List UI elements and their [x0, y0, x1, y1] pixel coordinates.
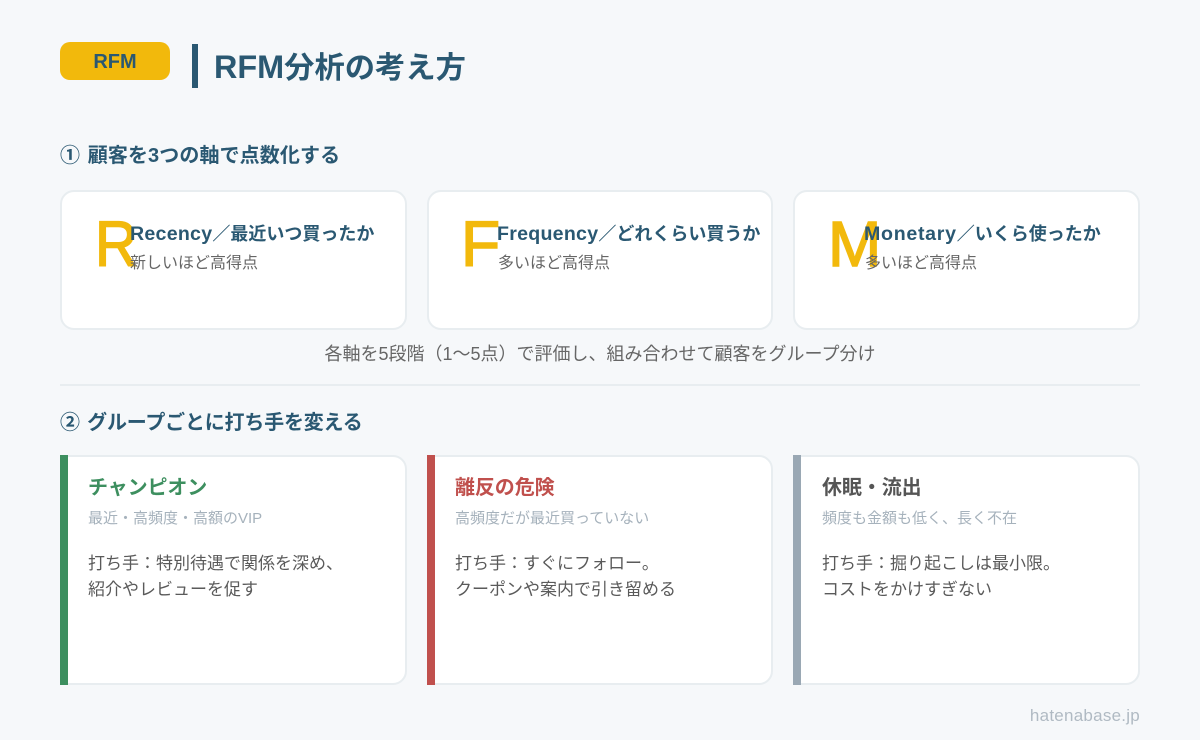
Recency heading: Recency／最近いつ買ったか [130, 223, 374, 245]
At risk description: 高頻度だが最近買っていない [455, 510, 649, 527]
Champion action: 打ち手：特別待遇で関係を深め、 [88, 554, 343, 573]
panel: Champion [60, 455, 407, 685]
Dormant action [822, 554, 1060, 599]
scoring note: 各軸を5段階（1〜5点）で評価し、組み合わせて顧客をグループ分け [325, 344, 875, 364]
Monetary description: 多いほど高得点 [865, 255, 977, 272]
Champion heading: チャンピオン [88, 477, 207, 499]
letter M: M [828, 208, 881, 280]
Dormant description: 頻度も金額も低く、長く不在 [822, 510, 1017, 527]
Frequency description: 多いほど高得点 [498, 255, 610, 272]
badge: RFM [60, 42, 170, 80]
badge: RFM: RFM [93, 51, 137, 73]
panel: Frequency [427, 190, 773, 330]
Dormant action: 打ち手：掘り起こしは最小限。 [822, 554, 1060, 573]
Dormant heading: 休眠・流出 [822, 477, 922, 499]
Champion action [88, 554, 343, 599]
At risk action: クーポンや案内で引き留める [455, 580, 676, 599]
Frequency heading: Frequency／どれくらい買うか [497, 223, 760, 245]
Monetary heading: Monetary／いくら使ったか [864, 223, 1101, 245]
heading: section 1: ① 顧客を3つの軸で点数化する [60, 145, 340, 167]
letter F: F [461, 208, 500, 280]
Champion description: 最近・高頻度・高額のVIP [88, 510, 262, 527]
heading: section 2: ② グループごとに打ち手を変える [60, 412, 363, 434]
panel: At risk [427, 455, 773, 685]
Dormant action: コストをかけすぎない [822, 580, 992, 599]
At risk action: 打ち手：すぐにフォロー。 [455, 554, 659, 573]
panel: Dormant [793, 455, 1140, 685]
title accent bar [192, 44, 198, 88]
panel: Recency [60, 190, 407, 330]
At risk heading: 離反の危険 [455, 477, 554, 499]
letter R: R [95, 208, 138, 280]
footer credit: hatenabase.jp [1030, 706, 1140, 725]
Champion action: 紹介やレビューを促す [88, 580, 258, 599]
Recency description: 新しいほど高得点 [130, 255, 258, 272]
title: RFM分析の考え方 [214, 49, 466, 85]
At risk action [455, 554, 676, 599]
panel: Monetary [793, 190, 1140, 330]
